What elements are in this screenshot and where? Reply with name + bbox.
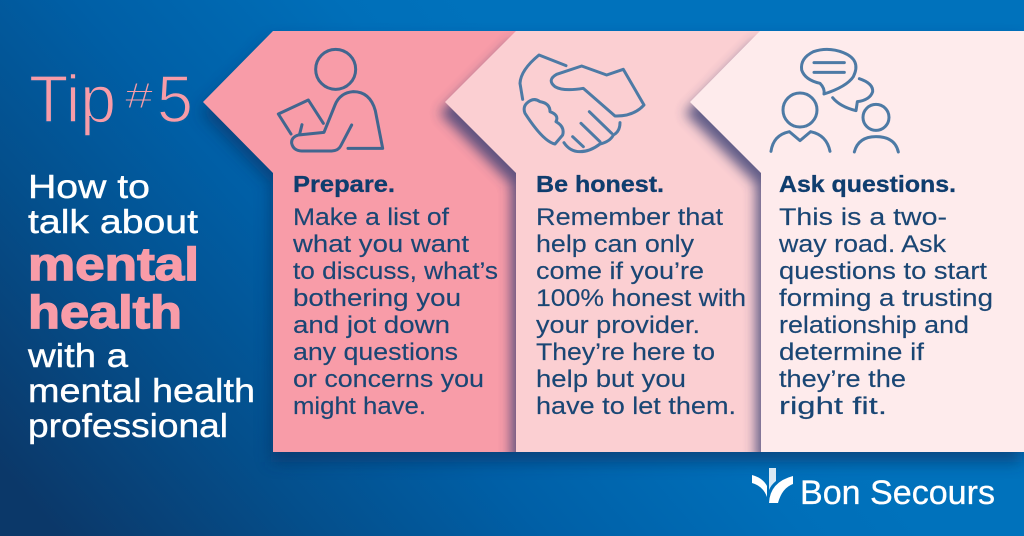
- text: be honest body: have to let them.: [536, 393, 736, 420]
- text: ask questions body: they’re the: [779, 366, 906, 393]
- text: ask questions body: This is a two-: [779, 204, 947, 231]
- headline: How to: [28, 168, 150, 205]
- text: prepare body: any questions: [293, 339, 458, 366]
- headline: with a: [27, 337, 129, 374]
- text: prepare body: Make a list of: [293, 204, 449, 231]
- tip heading: Tip: [29, 62, 116, 137]
- headline: talk about: [28, 203, 198, 240]
- text: be honest body: help but you: [536, 366, 686, 393]
- shadow on second panel: [678, 33, 761, 452]
- text: be honest body: Remember that: [536, 204, 723, 231]
- heading: be honest: Be honest.: [536, 171, 664, 197]
- text: ask questions body: relationship and: [779, 312, 969, 339]
- tip heading: #: [125, 75, 153, 116]
- text: prepare body: to discuss, what’s: [293, 258, 498, 285]
- headline: mental health: [28, 372, 255, 409]
- icon: handshake: [520, 55, 644, 152]
- panel: prepare: [203, 31, 520, 452]
- text: prepare body: might have.: [293, 393, 426, 420]
- text: be honest body: 100% honest with: [536, 285, 746, 312]
- panel: be honest: [445, 31, 765, 452]
- text: prepare body: [292, 204, 498, 420]
- text: ask questions body: [778, 204, 993, 420]
- text: ask questions body: way road. Ask: [778, 231, 947, 258]
- logo text: Bon Secours: [800, 474, 995, 512]
- text: prepare body: what you want: [292, 231, 469, 258]
- heading: ask questions: Ask questions.: [779, 171, 956, 197]
- icon: logo mark: [752, 468, 793, 503]
- text: be honest body: your provider.: [536, 312, 700, 339]
- text: ask questions body: determine if: [779, 339, 924, 366]
- icon: person with tablet: [278, 49, 383, 151]
- logo: Bon Secours: [752, 468, 995, 512]
- text: be honest body: come if you’re: [536, 258, 704, 285]
- text: be honest body: They’re here to: [536, 339, 715, 366]
- headline: health: [28, 286, 182, 338]
- text: ask questions body: right fit.: [779, 393, 887, 420]
- headline: professional: [28, 407, 228, 444]
- text: be honest body: [536, 204, 746, 420]
- icon: two people talking: [771, 49, 898, 152]
- shadow on first panel: [434, 33, 516, 452]
- headline: [27, 168, 255, 444]
- text: prepare body: and jot down: [293, 312, 450, 339]
- heading: prepare: Prepare.: [293, 171, 395, 197]
- headline: mental: [28, 238, 199, 290]
- text: prepare body: bothering you: [293, 285, 461, 312]
- text: ask questions body: forming a trusting: [779, 285, 993, 312]
- text: ask questions body: questions to start: [779, 258, 987, 285]
- text: prepare body: or concerns you: [293, 366, 484, 393]
- panel drop shadow: [201, 41, 1022, 462]
- tip heading: [29, 62, 193, 137]
- panel: ask questions: [690, 31, 1024, 452]
- tip heading: 5: [157, 62, 193, 137]
- text: be honest body: help can only: [536, 231, 694, 258]
